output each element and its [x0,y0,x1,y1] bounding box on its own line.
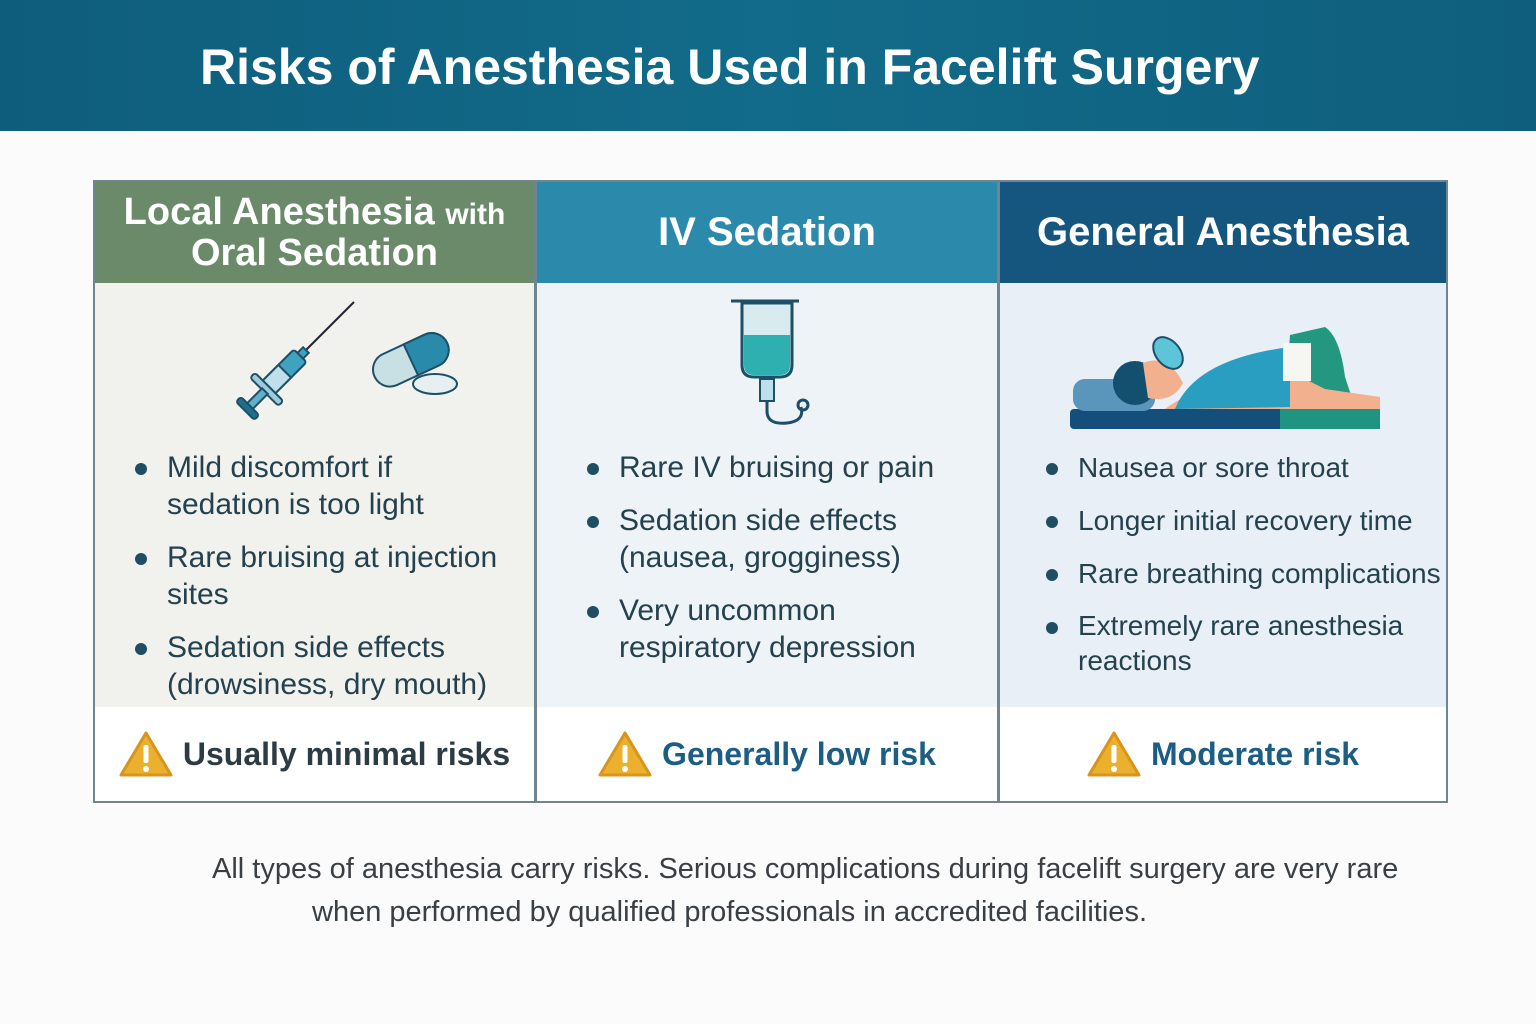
column heading: general [1000,182,1446,283]
footer: minimal risks [95,707,534,801]
bottom note [212,853,1398,928]
footer: minimal risks: Usually minimal risks [183,736,510,772]
column heading: general: General Anesthesia [1037,210,1409,254]
bullet list: IV: Sedation side effects (nausea, grogginess) [619,504,901,574]
bottom note: All types of anesthesia carry risks. Serious complications during facelift surgery are very rare [212,853,1398,885]
panel: IV sedation [535,180,999,803]
bullet list: local: Sedation side effects (drowsiness, dry mouth) [167,631,487,701]
panel: local anesthesia [93,180,536,803]
bullet list: local: Mild discomfort if sedation is too light [167,451,424,521]
column heading: local [95,182,534,283]
bullet list: IV [587,451,934,664]
icon: IV bag [731,300,810,425]
column heading: IV: IV Sedation [658,210,876,254]
header banner: Risks of Anesthesia Used in Facelift Surgery [200,39,1260,95]
icon: syringe and pills [236,301,458,420]
panel: general anesthesia [998,180,1448,803]
bullet list: general [1046,452,1441,676]
bullet list: general: Extremely rare anesthesia reactions [1078,610,1403,676]
icon: patient lying with mask [1070,327,1380,429]
footer: moderate risk: Moderate risk [1151,736,1359,772]
header banner [0,0,1536,131]
bottom note: when performed by qualified professionals in accredited facilities. [312,896,1147,928]
column heading: local: Oral Sedation [191,232,438,274]
footer: low risk: Generally low risk [662,736,936,772]
bullet list: local: Rare bruising at injection sites [167,541,497,611]
bullet list: general: Nausea or sore throat [1078,452,1349,483]
column heading: IV [537,182,997,283]
bullet list: general: Rare breathing complications [1078,558,1441,589]
footer: moderate risk [1000,707,1446,801]
footer: low risk [537,707,997,801]
column heading: local: Local Anesthesia with [124,190,505,232]
bullet list: general: Longer initial recovery time [1078,505,1413,536]
bullet list: IV: Very uncommon respiratory depression [619,594,916,664]
bullet list: IV: Rare IV bruising or pain [619,451,934,484]
bullet list: local [135,451,497,701]
